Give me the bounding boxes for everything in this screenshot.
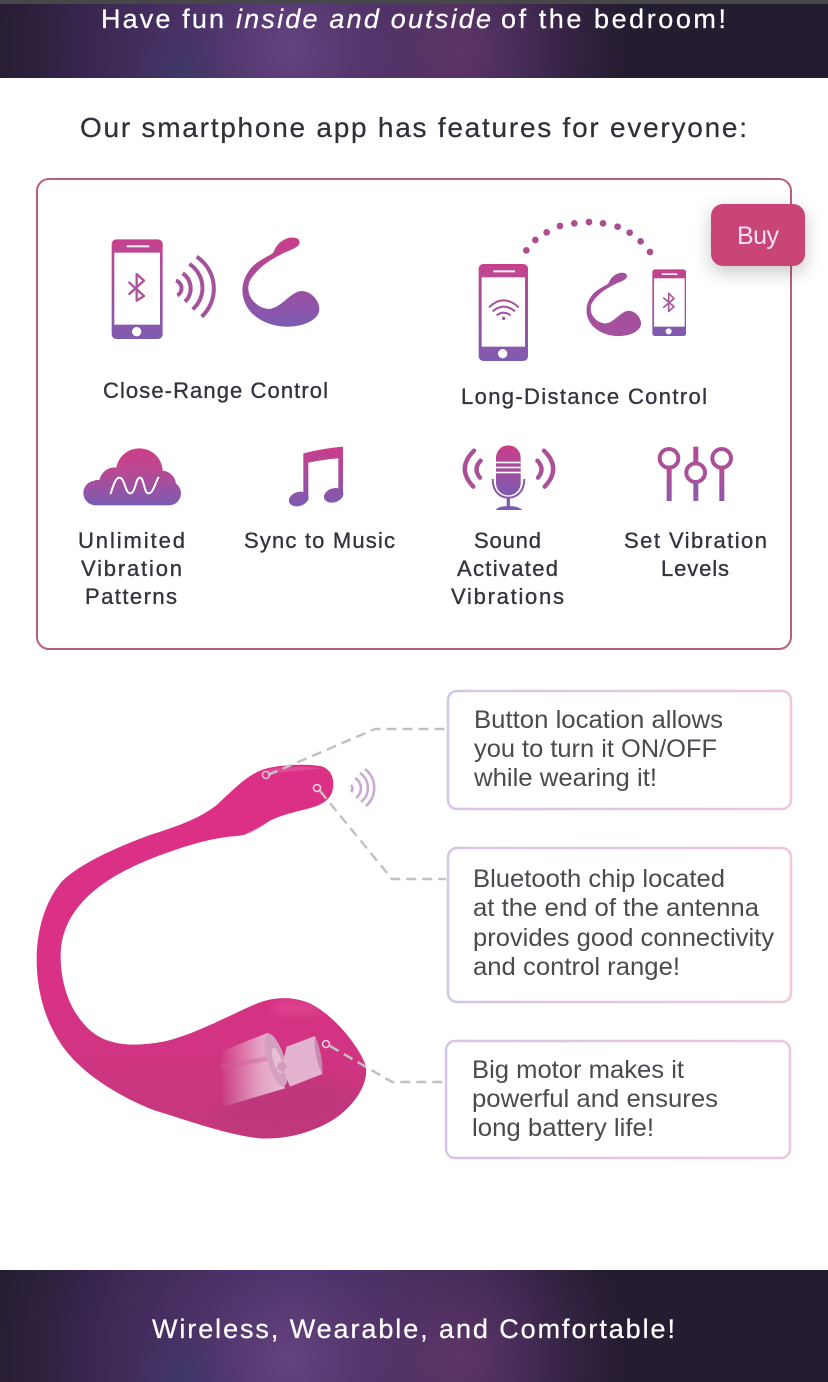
label: unlimited vibration patterns: Vibration <box>81 556 182 581</box>
banner text: inside and outside <box>236 4 491 34</box>
label: set vibration levels <box>624 528 767 581</box>
callout: big motor <box>446 1041 790 1158</box>
callout: bluetooth chip: and control range! <box>473 953 680 981</box>
callout: big motor: Big motor makes it <box>472 1056 684 1084</box>
buy button: Buy <box>737 222 780 250</box>
icon: long-distance control <box>479 219 686 361</box>
product illustration <box>37 765 366 1143</box>
icon: close-range control <box>112 237 319 339</box>
label: unlimited vibration patterns <box>78 528 185 609</box>
icon: signal waves <box>351 769 374 806</box>
callout: button location: while wearing it! <box>473 764 657 792</box>
label: close-range control: Close-Range Control <box>103 378 328 403</box>
label: set vibration levels: Set Vibration <box>624 528 767 553</box>
leader line: button <box>262 729 446 778</box>
label: sound activated vibrations: Activated <box>457 556 558 581</box>
callout: big motor: powerful and ensures <box>472 1085 718 1113</box>
buy button <box>711 204 805 266</box>
label: sync to music: Sync to Music <box>244 528 395 553</box>
callout: bluetooth chip: Bluetooth chip located <box>473 865 725 893</box>
leader line: motor <box>322 1040 446 1082</box>
callout: bluetooth chip <box>448 848 791 1002</box>
bottom banner <box>0 1270 828 1382</box>
label: unlimited vibration patterns: Patterns <box>85 584 177 609</box>
icon: cloud with wave <box>83 448 181 505</box>
callout: button location: Button location allows <box>474 706 723 734</box>
banner text <box>101 4 726 34</box>
callout: big motor: long battery life! <box>472 1114 654 1142</box>
icon: microphone <box>465 445 553 510</box>
banner text: Have fun <box>101 4 224 34</box>
label: unlimited vibration patterns: Unlimited <box>78 528 185 553</box>
label: sound activated vibrations: Vibrations <box>451 584 564 609</box>
label: sound activated vibrations: Sound <box>474 528 541 553</box>
callout: button location <box>448 691 791 809</box>
banner text: Wireless, Wearable, and Comfortable! <box>152 1314 675 1344</box>
icon: music note <box>287 447 345 509</box>
heading: Our smartphone app has features for everyone: <box>80 112 747 143</box>
leader line: bluetooth chip <box>314 784 446 879</box>
callout: button location: you to turn it ON/OFF <box>474 735 717 763</box>
label: set vibration levels: Levels <box>661 556 729 581</box>
panel: app features <box>37 179 791 649</box>
top banner <box>0 0 828 78</box>
banner text: of the bedroom! <box>501 4 726 34</box>
motor cutaway <box>220 1031 323 1107</box>
callout: bluetooth chip: at the end of the antenna <box>473 894 759 922</box>
icon: sliders <box>660 447 731 501</box>
label: long-distance control: Long-Distance Control <box>461 384 707 409</box>
label: sound activated vibrations <box>451 528 564 609</box>
callout: bluetooth chip: provides good connectivity <box>473 924 775 952</box>
